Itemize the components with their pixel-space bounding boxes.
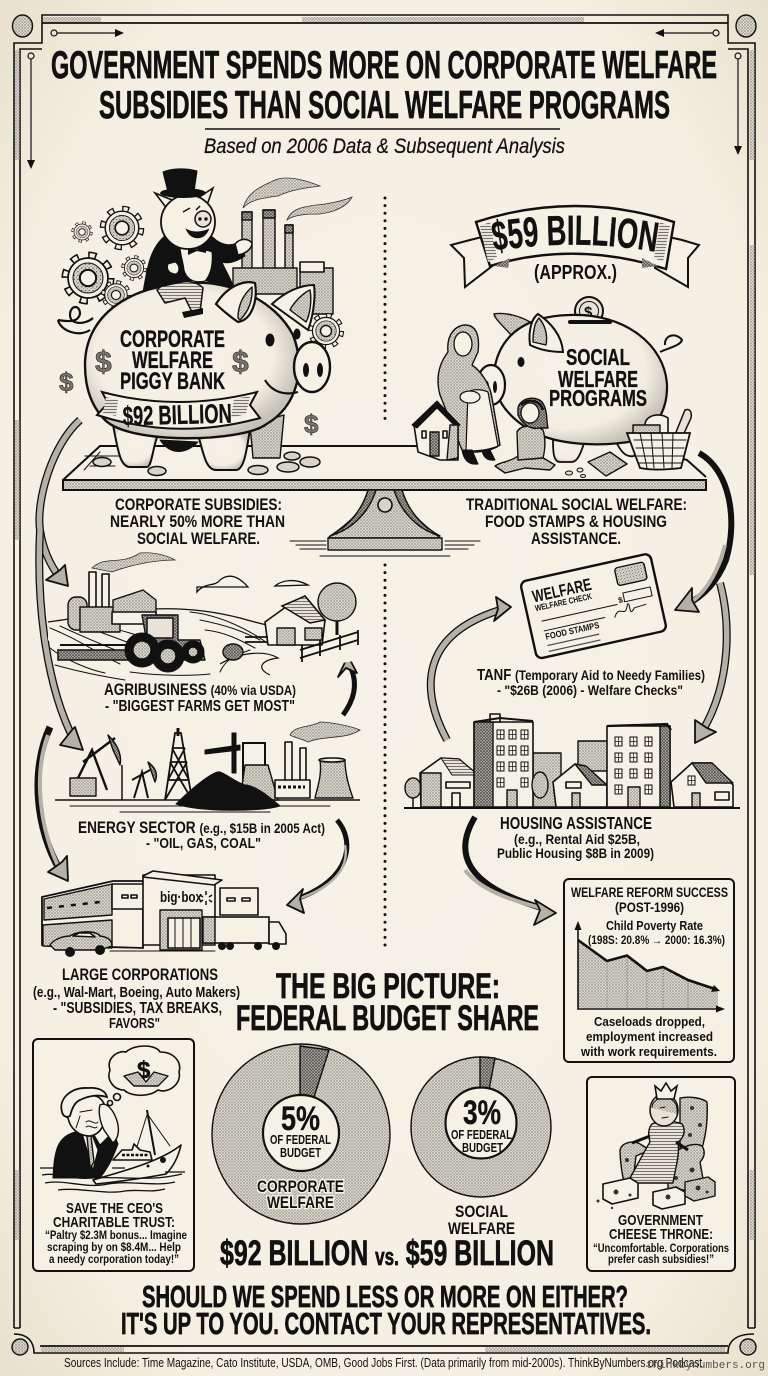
cooling tower <box>315 760 353 798</box>
house 2 <box>553 764 607 807</box>
heading: the big picture <box>236 967 539 1038</box>
$59 billion banner <box>449 204 701 289</box>
caption: housing assistance <box>497 813 654 861</box>
tall building 1 <box>474 722 533 807</box>
panel caption: prefer cash subsidies!” <box>608 1254 714 1266</box>
body label <box>120 326 225 395</box>
caption: agribusiness: - "BIGGEST FARMS GET MOST" <box>105 698 295 715</box>
factory <box>68 597 87 630</box>
caption: traditional social welfare: FOOD STAMPS & HOUSING <box>485 512 667 531</box>
arrow: pig to housing <box>695 583 727 743</box>
illustration: housing block <box>404 714 740 808</box>
caption: large corporations <box>33 965 240 1032</box>
ribbon: $92 billion: $92 BILLION <box>122 399 232 431</box>
tree <box>336 605 338 635</box>
hay bale <box>223 644 243 660</box>
panel: government cheese throne <box>587 1077 735 1271</box>
arrow: energy to agribusiness <box>338 656 357 715</box>
donut chart: corporate welfare 5%: CORPORATE <box>257 1177 344 1196</box>
arrow: to large corporations <box>38 727 68 881</box>
illustration: big-box store <box>42 871 286 956</box>
legs <box>250 415 284 458</box>
back buildings <box>533 753 561 807</box>
clouds <box>197 576 308 592</box>
book <box>588 452 627 476</box>
corporate factory and gears <box>66 178 352 346</box>
corporate piggy bank <box>58 282 330 476</box>
sinking boat <box>93 1110 181 1184</box>
caption: TANF: - "$26B (2006) - Welfare Checks" <box>497 682 683 698</box>
dollar signs: $ <box>59 367 74 397</box>
illustration: welfare check: $ <box>617 595 624 605</box>
panel: save the CEO's charitable trust <box>33 1039 194 1271</box>
arrow: energy to large corporations <box>287 820 347 913</box>
shirt <box>180 246 212 282</box>
caption: TANF <box>477 667 705 698</box>
social welfare piggy bank <box>477 297 682 462</box>
far ear <box>494 313 530 342</box>
top hat <box>163 169 197 192</box>
grocery basket <box>627 409 691 470</box>
body label: PIGGY BANK <box>120 368 225 395</box>
dollar signs: $ <box>304 409 319 439</box>
caption: agribusiness <box>104 681 296 715</box>
house 3 <box>671 763 733 807</box>
donut chart: social welfare 3%: SOCIAL <box>455 1202 508 1221</box>
title rule <box>205 128 560 130</box>
panel caption <box>593 1212 729 1266</box>
illustration: energy sector <box>55 722 360 812</box>
caption: housing assistance: (e.g., Rental Aid $25B, <box>514 831 640 847</box>
cheese blocks <box>596 1177 715 1209</box>
caption: corporate subsidies: NEARLY 50% MORE THAN <box>110 512 285 531</box>
smoke <box>243 178 352 220</box>
tail <box>660 335 682 352</box>
caption: large corporations: - "SUBSIDIES, TAX BREAKS, <box>53 1000 222 1017</box>
tall building 2 <box>607 726 670 807</box>
thought bubble <box>108 1046 180 1106</box>
car <box>50 932 112 956</box>
far ear <box>272 285 315 330</box>
panel caption: CHEESE THRONE: <box>609 1226 713 1243</box>
legs <box>615 440 645 456</box>
trousers <box>157 281 203 312</box>
throne <box>620 1097 707 1190</box>
social welfare piggy bank: $ <box>584 304 593 321</box>
donut chart: corporate welfare 5%: BUDGET <box>280 1146 321 1160</box>
body <box>85 283 299 438</box>
chart: child poverty rate <box>574 918 725 1012</box>
label: PROGRAMS <box>549 385 647 411</box>
coins <box>93 452 320 476</box>
caption: TANF: TANF (Temporary Aid to Needy Families) <box>477 667 705 684</box>
illustration: welfare check: FOOD STAMPS <box>544 620 600 642</box>
eyes <box>266 334 274 346</box>
illustration: big-box store: big·box <box>160 889 203 906</box>
caption: energy sector <box>78 819 325 852</box>
donut chart: social welfare 3%: OF FEDERAL <box>451 1128 512 1142</box>
arrow: pig to agribusiness <box>39 420 80 586</box>
house 1 <box>420 758 478 807</box>
dollar signs <box>59 346 319 439</box>
body label: CORPORATE <box>120 326 225 353</box>
approx label: (APPROX.) <box>534 262 617 284</box>
comparison figure: $92 BILLION vs. $59 BILLION <box>220 1234 554 1273</box>
donut chart: social welfare 3%: WELFARE <box>448 1219 515 1238</box>
head <box>155 193 172 210</box>
caption: agribusiness: AGRIBUSINESS (40% via USDA) <box>104 681 296 699</box>
heading: the big picture: FEDERAL BUDGET SHARE <box>236 999 539 1038</box>
small coins <box>566 468 586 478</box>
near ear <box>529 314 563 352</box>
subtitle: Based on 2006 Data & Subsequent Analysis <box>204 135 565 158</box>
body label: WELFARE <box>132 347 213 374</box>
dollar signs: $ <box>232 346 249 379</box>
panel caption: CHARITABLE TRUST: <box>53 1214 175 1231</box>
eye <box>518 357 524 367</box>
thought bubble: $ <box>137 1057 151 1084</box>
caption: traditional social welfare: TRADITIONAL SOCIAL WELFARE: <box>466 495 687 514</box>
label: SOCIAL <box>566 344 630 370</box>
$59 billion banner: $59 BILLION <box>492 216 659 254</box>
truck <box>203 917 286 950</box>
title <box>51 44 717 127</box>
tail <box>58 307 93 333</box>
watermark: thinkbynumbers.org <box>646 1360 765 1372</box>
top-hat pig capitalist <box>143 169 252 318</box>
oil derrick <box>165 728 192 800</box>
hills <box>48 608 360 680</box>
caption: housing assistance: HOUSING ASSISTANCE <box>500 813 652 833</box>
smile <box>265 380 298 394</box>
donut chart: corporate welfare 5%: OF FEDERAL <box>270 1133 331 1147</box>
caption: corporate subsidies <box>110 495 285 548</box>
tree <box>405 778 421 808</box>
panel caption <box>45 1200 187 1266</box>
child <box>495 398 555 473</box>
crying executive <box>53 1088 118 1178</box>
arrow: housing to welfare reform <box>465 817 556 925</box>
caption: traditional social welfare <box>466 495 687 548</box>
coal heap <box>176 772 280 810</box>
panel note <box>580 1014 717 1059</box>
panel note: employment increased <box>586 1029 713 1044</box>
near ear <box>216 282 256 322</box>
panel caption: “Paltry $2.3M bonus... Imagine <box>45 1230 187 1242</box>
illustration: welfare check: WELFARE <box>531 575 593 606</box>
coin slot <box>568 320 612 324</box>
pumpjack <box>70 735 156 800</box>
label <box>549 344 647 411</box>
label: WELFARE <box>558 366 638 392</box>
illustration: agribusiness farm <box>48 553 360 680</box>
center dotted divider <box>384 198 386 945</box>
caption: housing assistance: Public Housing $8B in 2009) <box>497 845 654 861</box>
caption: large corporations: (e.g., Wal-Mart, Boeing, Auto Makers) <box>33 984 240 1001</box>
queen <box>627 1083 688 1183</box>
panel: welfare reform success <box>564 879 734 1062</box>
mother <box>438 325 500 464</box>
donut chart: social welfare 3% <box>411 1057 551 1238</box>
panel heading: (POST-1996) <box>615 900 684 915</box>
panel caption: scraping by on $8.4M... Help <box>47 1242 181 1254</box>
donut chart: social welfare 3%: BUDGET <box>462 1141 503 1155</box>
barn <box>265 596 325 645</box>
panel caption: SAVE THE CEO'S <box>66 1200 163 1217</box>
donut chart: corporate welfare 5% <box>212 1044 390 1224</box>
arm <box>167 262 179 274</box>
donut chart: social welfare 3%: 3% <box>463 1094 501 1132</box>
coin <box>575 297 603 325</box>
caption: large corporations: FAVORS" <box>109 1015 160 1032</box>
panel note: with work requirements. <box>580 1044 717 1059</box>
snout <box>477 365 505 405</box>
black jacket <box>143 229 245 292</box>
dollar signs: $ <box>95 346 112 379</box>
donut chart: corporate welfare 5%: WELFARE <box>267 1193 334 1212</box>
caption: corporate subsidies: SOCIAL WELFARE. <box>137 529 260 548</box>
waves <box>40 1168 185 1192</box>
caption: energy sector: ENERGY SECTOR (e.g., $15B in 2005 Act) <box>78 819 325 837</box>
chimneys <box>233 210 333 314</box>
tractor <box>58 650 130 660</box>
panel heading <box>571 885 728 915</box>
illustration: welfare check <box>520 553 667 659</box>
body <box>494 315 667 444</box>
snout <box>294 342 330 392</box>
gears <box>103 209 141 247</box>
arrow: housing to TANF <box>431 597 511 740</box>
donut chart: corporate welfare 5%: 5% <box>281 1100 320 1138</box>
panel caption: “Uncomfortable. Corporations <box>593 1243 729 1255</box>
toy house <box>412 401 460 460</box>
mother, child, house, groceries <box>412 325 691 478</box>
caption: traditional social welfare: ASSISTANCE. <box>531 529 621 548</box>
panel note: Caseloads dropped, <box>594 1014 705 1029</box>
panel heading: WELFARE REFORM SUCCESS <box>571 885 728 900</box>
call to action <box>121 1279 651 1341</box>
ribbon: $92 billion <box>97 392 260 431</box>
arrow: pig to TANF <box>675 453 731 612</box>
chart: child poverty rate: Child Poverty Rate <box>606 918 703 933</box>
caption: large corporations: LARGE CORPORATIONS <box>62 965 218 984</box>
chart: child poverty rate: (198S: 20.8% → 2000: 16.3%) <box>588 935 725 947</box>
illustration: welfare check: WELFARE CHECK <box>534 591 593 613</box>
caption: corporate subsidies: CORPORATE SUBSIDIES: <box>115 495 282 514</box>
panel caption: a needy corporation today!” <box>49 1254 179 1266</box>
panel caption: GOVERNMENT <box>618 1212 703 1229</box>
heading: the big picture: THE BIG PICTURE: <box>276 967 500 1006</box>
refinery and stacks <box>205 722 360 800</box>
arrow: pig to energy <box>39 530 83 750</box>
caption: energy sector: - "OIL, GAS, COAL" <box>146 835 261 852</box>
fence <box>245 630 358 662</box>
seesaw platform <box>63 446 706 556</box>
